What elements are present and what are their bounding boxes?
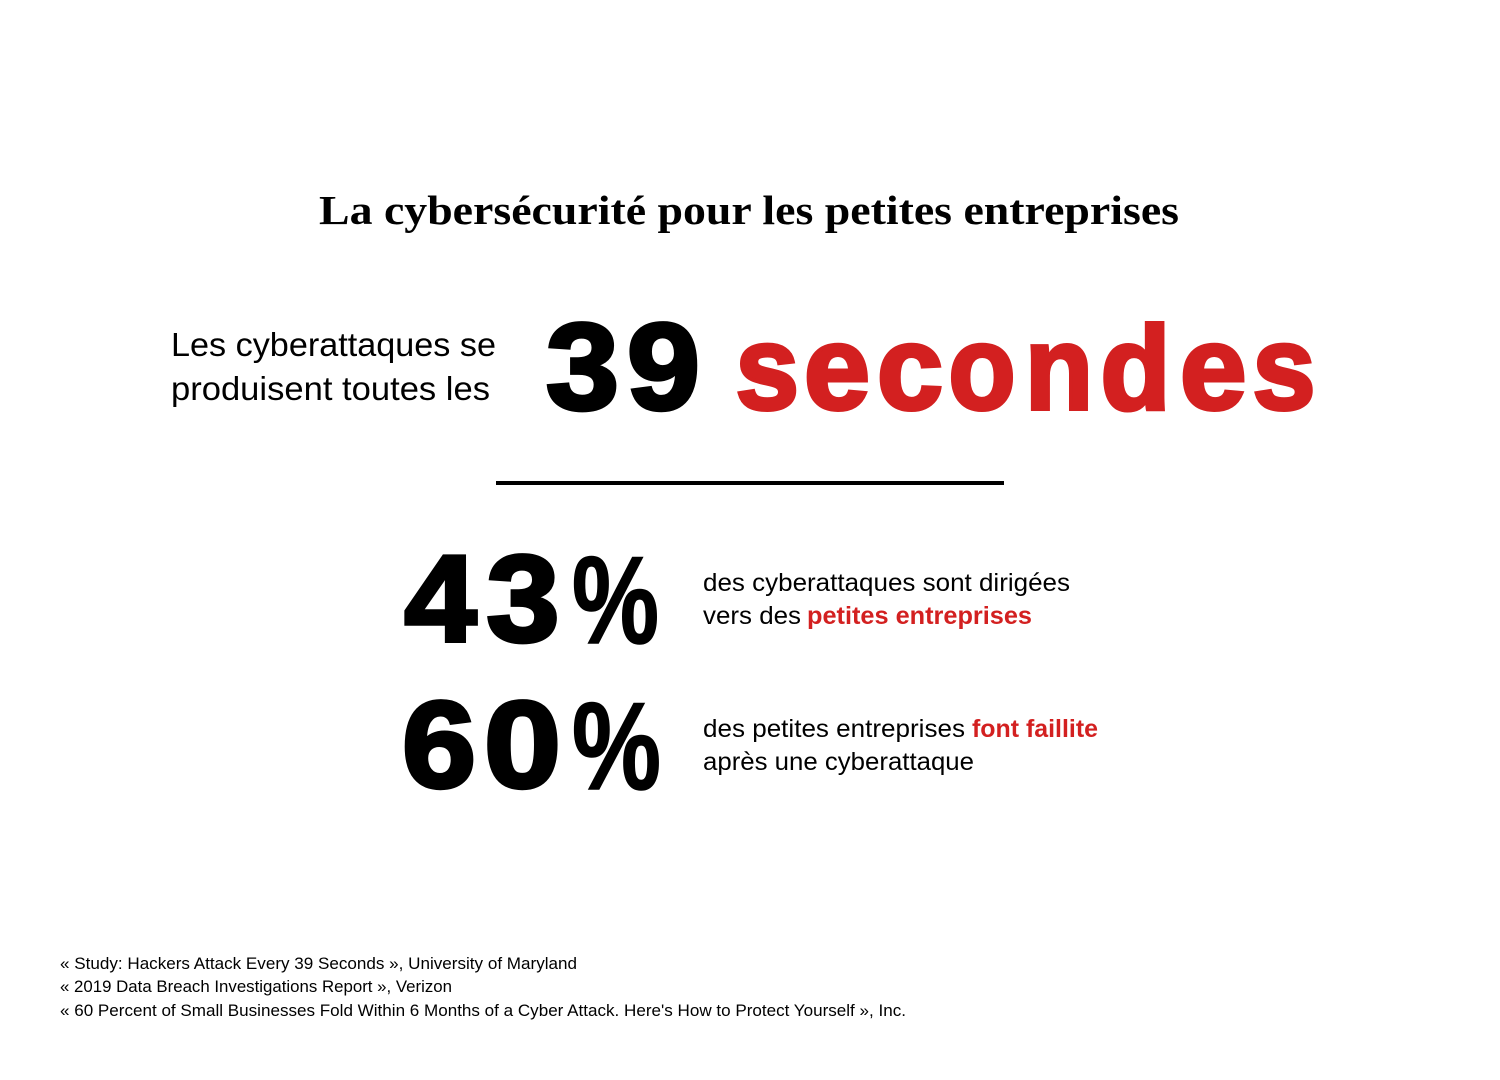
text block: 43% description <box>703 569 1070 630</box>
text block: 60% description <box>703 715 1098 776</box>
headline statistic: 39 secondes: s <box>1252 302 1316 435</box>
headline statistic: 39 secondes: 9 <box>627 299 700 436</box>
headline statistic: 39 secondes: o <box>948 302 1016 435</box>
statistic: 60% <box>402 677 661 816</box>
text block: 60% description: font faillite <box>972 715 1098 743</box>
text block: 60% description: des petites entreprises <box>703 715 965 743</box>
text block: attack frequency intro <box>171 326 496 407</box>
headline statistic: 39 secondes <box>546 299 1316 436</box>
statistic: 43%: % <box>572 532 659 670</box>
statistic: 60%: % <box>572 678 661 816</box>
statistic: 43%: 4 <box>404 531 476 668</box>
statistic: 43%: 3 <box>486 531 560 668</box>
headline statistic: 39 secondes: d <box>1100 302 1170 435</box>
text block: 43% description: petites entreprises <box>807 602 1032 630</box>
headline statistic: 39 secondes: n <box>1025 302 1093 435</box>
statistic: 60%: 0 <box>484 677 561 814</box>
text block: 60% description: après une cyberattaque <box>703 748 974 776</box>
headline statistic: 39 secondes: s <box>736 302 799 435</box>
text block: 43% description: des cyberattaques sont dirigées <box>703 569 1070 597</box>
sources: « 60 Percent of Small Businesses Fold Within 6 Months of a Cyber Attack. Here's How to Protect Yourself », Inc. <box>60 1001 906 1020</box>
sources: « Study: Hackers Attack Every 39 Seconds », University of Maryland <box>60 954 577 973</box>
headline statistic: 39 secondes: 3 <box>546 299 619 436</box>
text block: attack frequency intro: Les cyberattaques se <box>171 326 496 363</box>
title: La cybersécurité pour les petites entreprises <box>319 187 1179 233</box>
headline statistic: 39 secondes: e <box>804 302 870 435</box>
headline statistic: 39 secondes: e <box>1180 302 1246 435</box>
sources: « 2019 Data Breach Investigations Report », Verizon <box>60 977 452 996</box>
text block: attack frequency intro: produisent toutes les <box>171 370 490 407</box>
divider <box>496 481 1004 485</box>
headline statistic: 39 secondes: c <box>877 302 943 435</box>
sources <box>60 954 906 1020</box>
statistic: 60%: 6 <box>402 677 476 814</box>
text block: 43% description: vers des <box>703 602 801 630</box>
statistic: 43% <box>404 531 659 670</box>
